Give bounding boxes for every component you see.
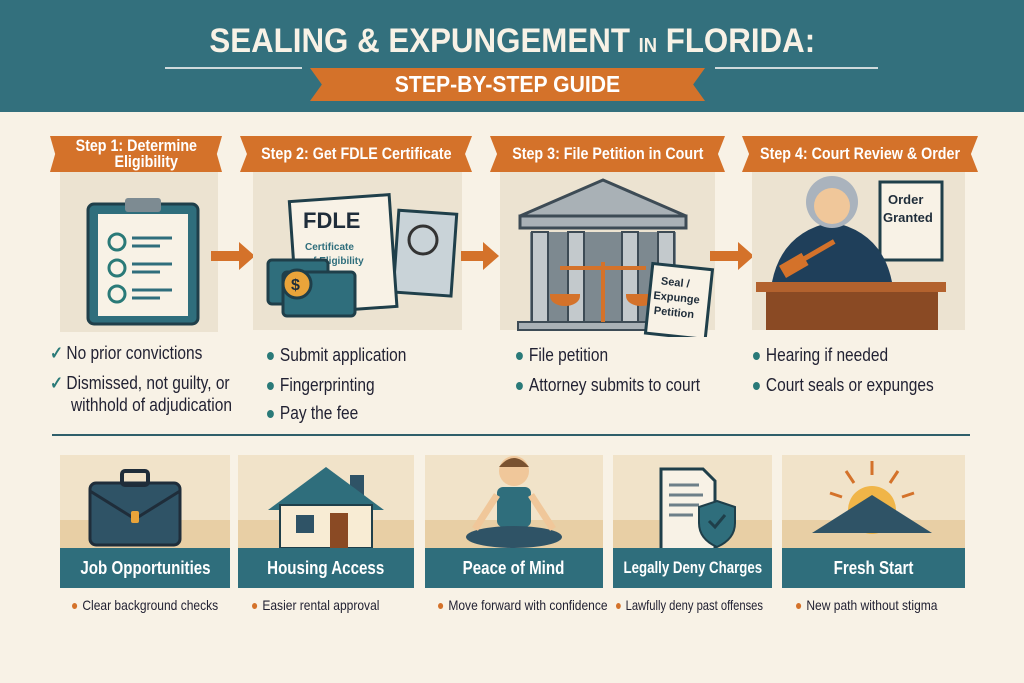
card: legally deny charges: Legally Deny Charges [623,558,762,577]
card: fresh start [782,455,965,588]
bullets: step 2: Fingerprinting [280,375,375,395]
step 2 [240,136,472,330]
icon: house [268,467,384,548]
card: housing access: Housing Access [267,558,385,578]
arrow 2 [461,242,499,270]
banner: step 2 [240,136,472,172]
panel: judge: Granted [883,210,933,225]
panel: FDLE certificate: $ [291,277,300,294]
panel: judge: Order [888,192,923,207]
arrow 3 [710,242,752,270]
text: Clear background checks [82,597,218,613]
card: peace of mind [425,455,603,588]
banner: step 4: Step 4: Court Review & Order [760,144,960,163]
header band [0,0,1024,112]
panel: FDLE certificate: of Eligibility [307,256,364,267]
arrow 1 [211,242,253,270]
icon: meditating person [466,456,562,548]
icon: sunrise [812,461,932,534]
text: Easier rental approval [262,597,379,613]
text: Move forward with confidence [448,597,608,613]
panel: clipboard [60,172,218,332]
banner: step 2: Step 2: Get FDLE Certificate [261,144,451,163]
bullets: step 3: File petition [529,345,608,365]
panel: FDLE certificate: FDLE [303,208,360,233]
banner: step 3: Step 3: File Petition in Court [512,144,703,163]
bullets: step 2: Pay the fee [280,403,358,423]
bullets: step 4: Court seals or expunges [766,375,934,395]
text: Lawfully deny past offenses [626,597,763,613]
text: New path without stigma [806,597,937,613]
panel: courthouse: Seal / [660,275,690,290]
panel: courthouse: Petition [653,305,695,321]
panel: FDLE certificate [253,172,462,330]
subtitle ribbon: STEP-BY-STEP GUIDE [395,71,620,97]
bullets: step 2 [267,345,406,423]
bullets: step 3: Attorney submits to court [529,375,700,395]
bullets: step 2: Submit application [280,345,406,365]
card: peace of mind: Peace of Mind [463,558,565,578]
panel: courthouse [500,172,715,330]
card: housing access [238,455,414,588]
panel: judge [752,172,965,330]
step 1 [50,136,222,332]
banner: step 3 [490,136,725,172]
bullets: step 4: Hearing if needed [766,345,888,365]
card: legally deny charges [613,455,772,588]
step 3 [490,136,725,337]
bullets: step 1: withhold of adjudication [71,395,232,415]
bullets: step 3 [516,345,700,395]
banner: step 4 [742,136,978,172]
banner: step 1 [50,136,222,172]
card: fresh start: Fresh Start [834,558,913,578]
step 4 [742,136,978,330]
banner: step 1: Step 1: Determine [75,136,197,155]
bullets: step 4 [753,345,934,395]
title: SEALING & EXPUNGEMENT IN FLORIDA: [209,22,815,60]
bullets: step 1 [50,343,232,415]
subtitle ribbon [310,68,705,101]
panel: courthouse: Expunge [653,290,700,307]
card: job opportunities [60,455,230,588]
bullets: step 1: ✓Dismissed, not guilty, or [50,373,230,393]
card: job opportunities: Job Opportunities [80,558,210,578]
bullets: step 1: ✓No prior convictions [50,343,202,363]
icon: document with shield [660,468,736,548]
panel: FDLE certificate: Certificate [305,242,354,253]
banner: step 1: Eligibility [114,152,178,171]
icon: briefcase [88,469,182,546]
